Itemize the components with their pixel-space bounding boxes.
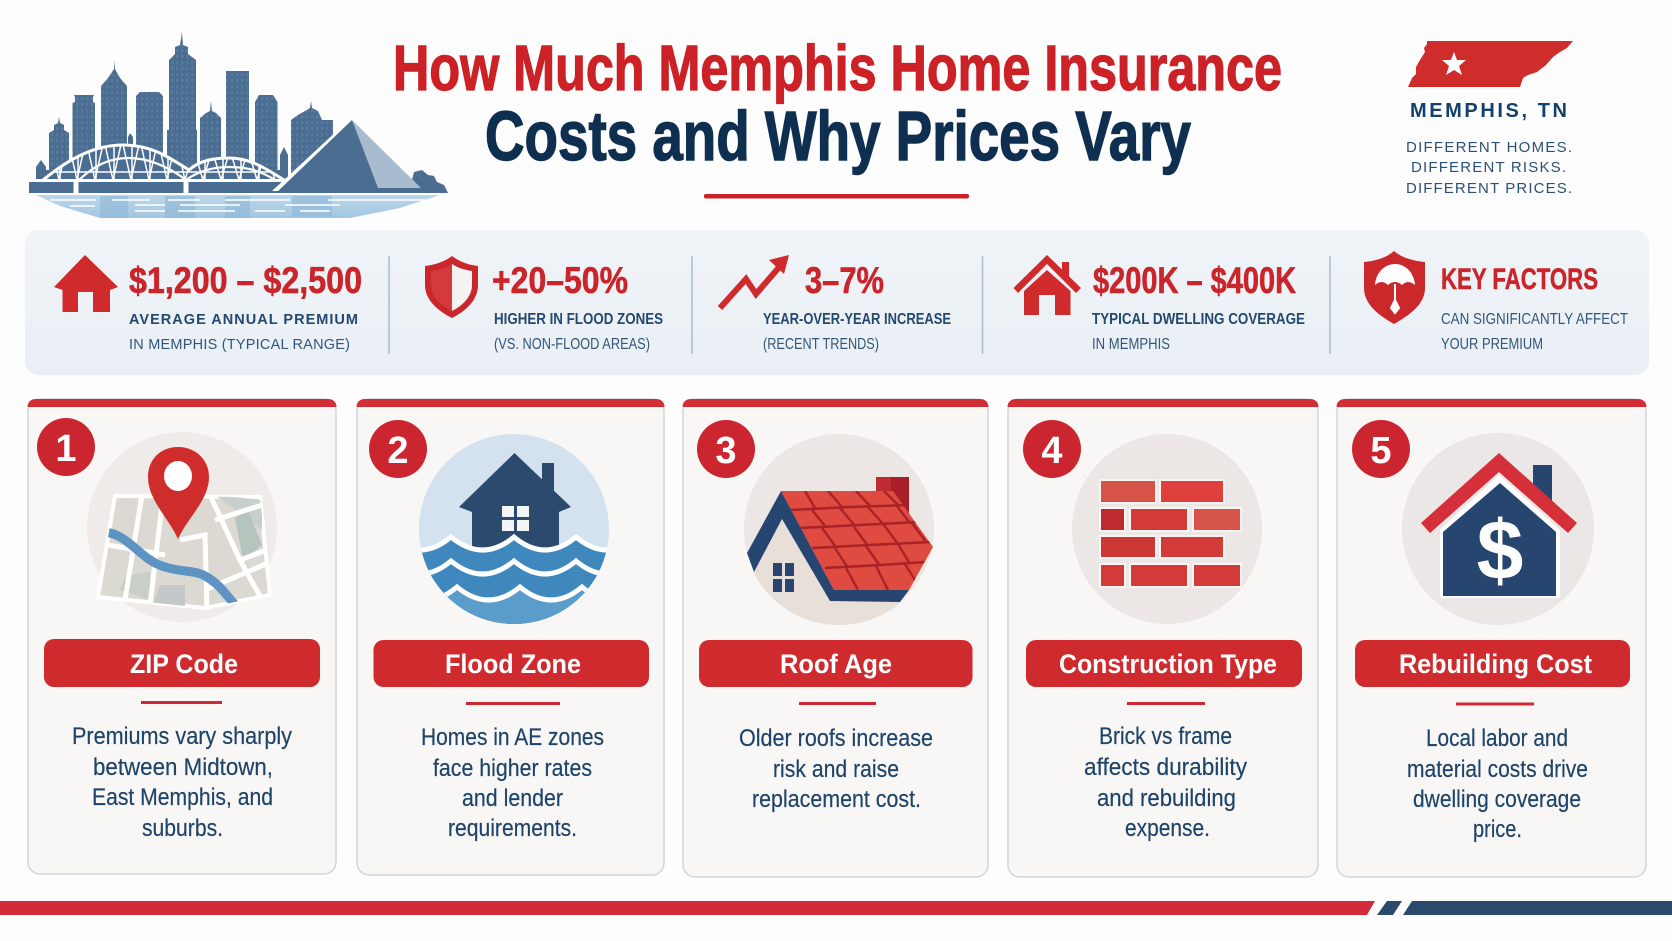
description: and lender [462, 785, 563, 812]
panel: factor 1 ZIP Code [28, 399, 336, 874]
stat: typical dwelling coverage: TYPICAL DWELLING COVERAGE [1092, 311, 1305, 328]
badge: number 4 [1023, 420, 1081, 478]
stat: key factors: KEY FACTORS [1441, 263, 1598, 296]
description: affects durability [1084, 754, 1247, 781]
stat: higher in flood zones: +20–50% [492, 260, 628, 301]
stat: year-over-year increase [720, 255, 951, 353]
panel: factor 5 Rebuilding Cost [1336, 399, 1646, 877]
icon: map with location pin [87, 432, 280, 622]
title: Costs and Why Prices Vary [485, 97, 1191, 175]
stat: year-over-year increase: 3–7% [805, 260, 884, 301]
badge: number 2 [369, 420, 427, 478]
illustration: Memphis skyline with bridge and pyramid [29, 32, 448, 218]
stat: average annual premium: $1,200 – $2,500 [129, 260, 362, 301]
description [739, 725, 933, 813]
bridge [29, 140, 284, 193]
icon: shield [425, 256, 478, 318]
stat: typical dwelling coverage [1014, 255, 1305, 353]
label: Construction Type [1026, 640, 1302, 687]
footer stripe [0, 901, 1672, 915]
label: Flood Zone [374, 640, 649, 687]
description: requirements. [448, 815, 577, 842]
label: Rebuilding Cost [1355, 640, 1630, 687]
panel: factor 2 Flood Zone [356, 399, 664, 875]
stat: year-over-year increase: YEAR-OVER-YEAR INCREASE [763, 311, 951, 328]
icon: house with dollar sign [1402, 433, 1594, 625]
icon: flooded house [419, 434, 609, 624]
description: price. [1473, 816, 1522, 843]
panel: factor 3 Roof Age [682, 399, 988, 877]
stat: typical dwelling coverage: $200K – $400K [1093, 260, 1296, 301]
badge: number 3 [697, 420, 755, 478]
description: East Memphis, and [92, 784, 273, 811]
panel: key stats [25, 230, 1649, 375]
pyramid [272, 117, 430, 193]
description: Older roofs increase [739, 725, 933, 752]
badge: number 1 [37, 418, 95, 476]
description: dwelling coverage [1413, 786, 1581, 813]
stat: key factors: YOUR PREMIUM [1441, 336, 1543, 353]
badge: number 5: 5 [1370, 430, 1392, 472]
stat: higher in flood zones: (VS. NON-FLOOD AREAS) [494, 336, 650, 353]
description: replacement cost. [752, 786, 921, 813]
label: ZIP Code [44, 639, 320, 687]
description: suburbs. [142, 815, 223, 842]
description: Brick vs frame [1099, 723, 1232, 750]
icon: Tennessee map with star [1408, 41, 1573, 87]
panel: factor 4 Construction Type [1008, 399, 1318, 877]
description: Premiums vary sharply [72, 723, 292, 750]
stat: higher in flood zones [425, 256, 663, 353]
icon: red shingled roof [744, 434, 934, 640]
location badge: Memphis, TN: DIFFERENT PRICES. [1406, 180, 1572, 197]
title underline [704, 194, 969, 198]
label: Roof Age: Roof Age [780, 649, 892, 679]
location badge: Memphis, TN [1406, 41, 1573, 197]
stat: average annual premium [54, 255, 362, 353]
stat: key factors: CAN SIGNIFICANTLY AFFECT [1441, 311, 1628, 328]
title [393, 32, 1282, 175]
icon: shield with umbrella [1364, 251, 1425, 324]
label: Construction Type: Construction Type [1059, 649, 1277, 679]
icon: rising arrow [720, 255, 789, 308]
title: How Much Memphis Home Insurance [393, 32, 1282, 104]
stat: average annual premium: IN MEMPHIS (TYPICAL RANGE) [129, 337, 350, 353]
label: ZIP Code: ZIP Code [130, 649, 238, 679]
badge: number 4: 4 [1041, 430, 1063, 472]
location badge: Memphis, TN: DIFFERENT HOMES. [1406, 139, 1572, 156]
stat: year-over-year increase: (RECENT TRENDS) [763, 336, 879, 353]
description: face higher rates [433, 755, 592, 782]
location badge: Memphis, TN: DIFFERENT RISKS. [1411, 159, 1566, 176]
description: Homes in AE zones [421, 724, 604, 751]
badge: number 1: 1 [55, 428, 77, 470]
label: Roof Age [699, 640, 972, 687]
icon: brick wall [1072, 434, 1262, 624]
label: Rebuilding Cost: Rebuilding Cost [1399, 649, 1592, 679]
badge: number 2: 2 [387, 430, 409, 472]
description [1084, 723, 1247, 842]
icon: house with chevron roof [1014, 255, 1081, 315]
label: Flood Zone: Flood Zone [445, 649, 581, 679]
description [72, 723, 292, 842]
badge: number 3: 3 [715, 430, 737, 472]
stat: key factors [1364, 251, 1628, 353]
stat: higher in flood zones: HIGHER IN FLOOD ZONES [494, 311, 663, 328]
towers [36, 32, 333, 190]
stat: typical dwelling coverage: IN MEMPHIS [1092, 336, 1170, 353]
description: and rebuilding [1097, 785, 1236, 812]
description: risk and raise [773, 756, 899, 783]
description: material costs drive [1407, 756, 1588, 783]
trees [405, 170, 448, 193]
icon: house [54, 255, 118, 312]
location badge: Memphis, TN: MEMPHIS, TN [1410, 100, 1567, 122]
description [1407, 725, 1588, 843]
stat: average annual premium: AVERAGE ANNUAL PREMIUM [129, 312, 358, 328]
water reflection [36, 195, 440, 218]
badge: number 5 [1352, 420, 1410, 478]
description: Local labor and [1426, 725, 1568, 752]
description: expense. [1125, 815, 1210, 842]
icon: house with dollar sign: $ [1477, 503, 1523, 597]
description [421, 724, 604, 842]
description: between Midtown, [93, 754, 273, 781]
